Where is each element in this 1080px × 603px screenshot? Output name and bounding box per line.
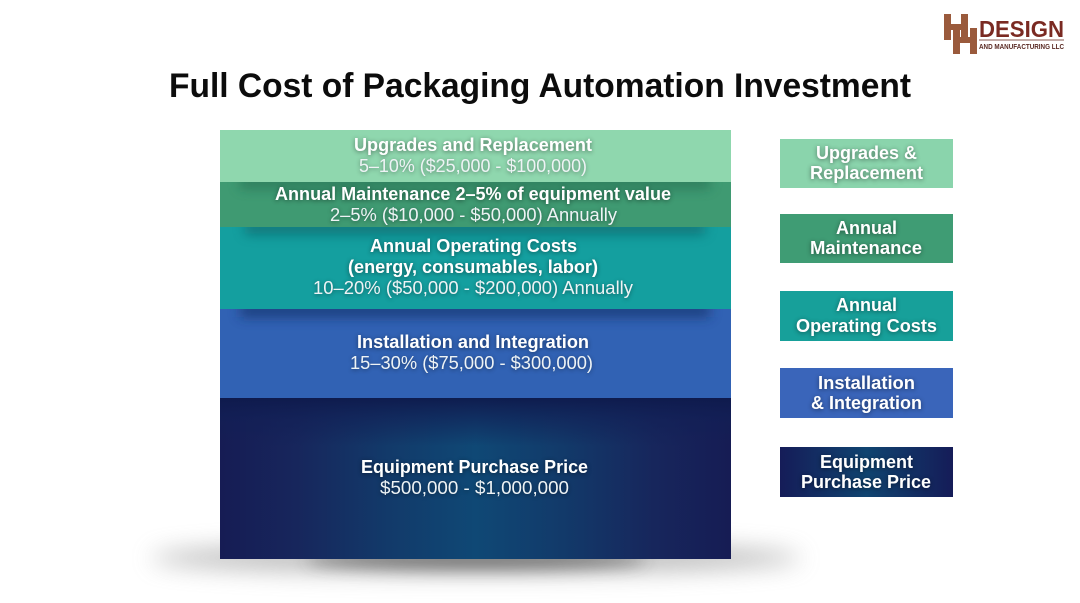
legend: equipment purchase price: Equipment [820, 451, 913, 472]
layer: installation and integration: 15–30% ($75,000 - $300,000) [350, 353, 593, 373]
logo: HH Design and Manufacturing LLC [944, 14, 1064, 54]
logo: HH Design and Manufacturing LLC: DESIGN [979, 16, 1064, 42]
legend: installation and integration [780, 368, 953, 418]
legend: installation and integration: Installation [818, 372, 915, 393]
base shadow [151, 543, 801, 573]
legend: equipment purchase price: Purchase Price [801, 471, 931, 492]
stacked cost block [220, 130, 731, 559]
legend: annual maintenance: Maintenance [810, 237, 922, 258]
legend: annual operating costs: Operating Costs [796, 315, 937, 336]
layer: upgrades and replacement: 5–10% ($25,000 - $100,000) [359, 156, 587, 176]
layer: annual operating costs: (energy, consumables, labor) [348, 257, 598, 277]
layer: equipment purchase price [220, 398, 731, 559]
legend: upgrades and replacement: Replacement [810, 162, 923, 183]
layer: installation and integration [220, 304, 731, 398]
layer: annual maintenance [220, 177, 731, 227]
logo: HH Design and Manufacturing LLC: AND MANUFACTURING LLC [979, 44, 1064, 51]
legend: annual operating costs [780, 291, 953, 341]
layer: annual maintenance: 2–5% ($10,000 - $50,000) Annually [330, 205, 617, 225]
layer: installation and integration: Installation and Integration [357, 332, 589, 352]
layer: annual operating costs: 10–20% ($50,000 - $200,000) Annually [313, 278, 633, 298]
layer: equipment purchase price: $500,000 - $1,000,000 [380, 478, 569, 498]
legend: equipment purchase price [780, 447, 953, 497]
layer: upgrades and replacement: Upgrades and Replacement [354, 135, 592, 155]
legend: upgrades and replacement [780, 139, 953, 188]
layer: annual maintenance: Annual Maintenance 2–5% of equipment value [275, 184, 671, 204]
legend: installation and integration: & Integration [811, 392, 922, 413]
legend: annual operating costs: Annual [836, 294, 897, 315]
layer: annual operating costs: Annual Operating Costs [370, 236, 577, 256]
title: Full Cost of Packaging Automation Investment [169, 67, 911, 105]
legend [780, 139, 953, 497]
legend: annual maintenance: Annual [836, 217, 897, 238]
layer: equipment purchase price: Equipment Purchase Price [361, 457, 588, 477]
layer: upgrades and replacement [220, 130, 731, 182]
legend: annual maintenance [780, 214, 953, 263]
legend: upgrades and replacement: Upgrades & [816, 142, 917, 163]
layer: annual operating costs [220, 222, 731, 309]
